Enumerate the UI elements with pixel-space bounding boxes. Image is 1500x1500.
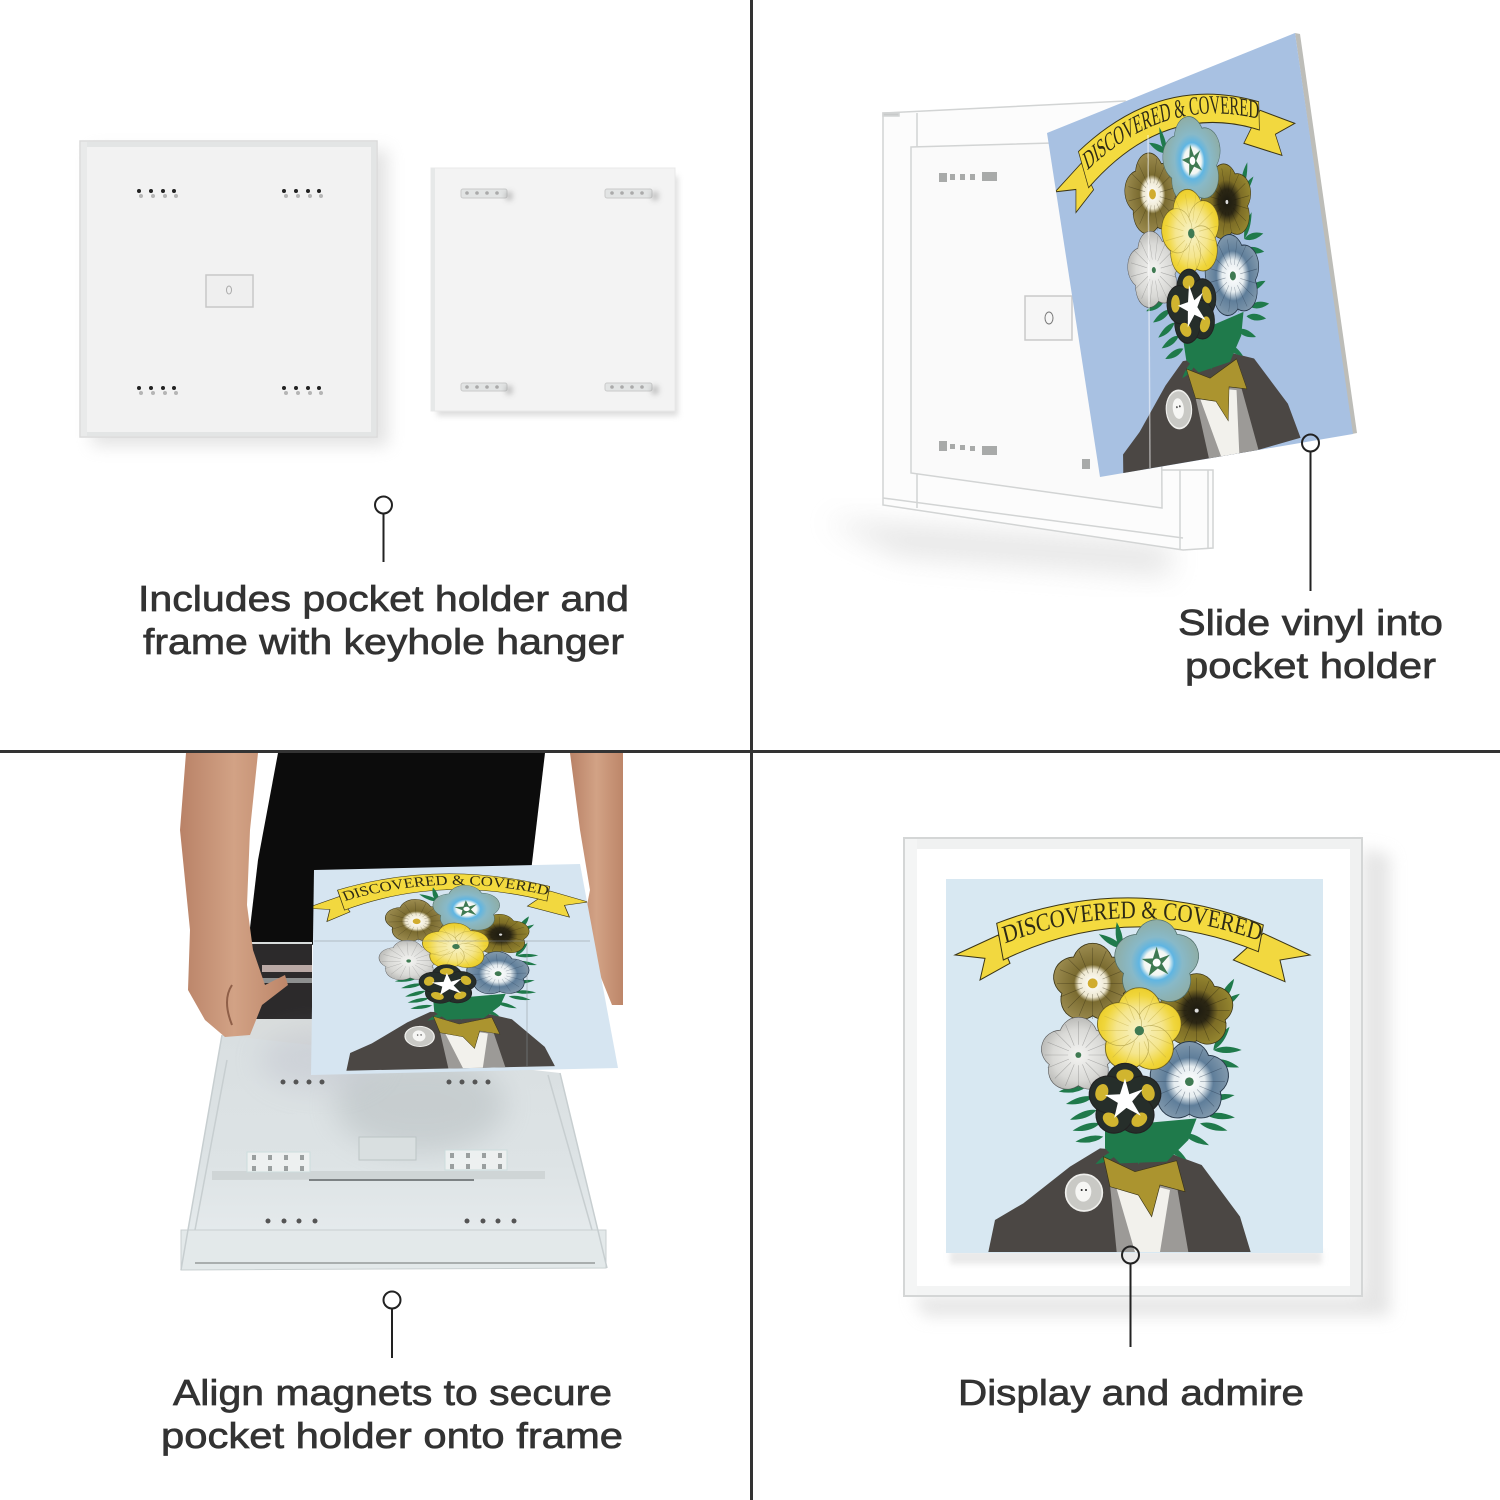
caption: includes: Includes pocket holder and — [138, 578, 629, 619]
person torso — [248, 753, 545, 945]
callout: display — [1122, 1246, 1139, 1347]
acrylic frame with keyhole hanger — [80, 141, 388, 446]
caption: align magnets: Align magnets to secure — [173, 1372, 612, 1413]
panel: slide vinyl into holder — [852, 33, 1357, 580]
logo badge — [1025, 296, 1072, 340]
album cover: DISCOVERED & COVERED — [1001, 902, 1262, 944]
album cover held: DISCOVERED & COVERED — [342, 876, 548, 901]
left arm and hand — [180, 753, 288, 1037]
acrylic frame — [904, 838, 1362, 1296]
caption: slide vinyl: pocket holder — [1185, 645, 1436, 686]
panel: parts included — [80, 141, 678, 446]
caption: slide vinyl: Slide vinyl into — [1178, 602, 1443, 643]
callout: align magnets — [384, 1292, 400, 1358]
floor shadow — [825, 520, 1170, 575]
caption: align magnets — [161, 1372, 623, 1456]
acrylic tray — [181, 942, 607, 1270]
caption: includes: frame with keyhole hanger — [143, 621, 624, 662]
frame shadow — [912, 848, 1390, 1316]
standing acrylic frame — [883, 101, 1213, 550]
callout: pocket holder and frame — [375, 496, 392, 562]
panel: display and admire — [903, 837, 1394, 1320]
caption: display: Display and admire — [958, 1372, 1304, 1413]
magnet clips — [939, 172, 1090, 469]
callout: slide vinyl — [1302, 434, 1319, 591]
pocket holder — [431, 168, 678, 416]
panel: align magnets — [180, 753, 623, 1270]
caption: slide vinyl — [1178, 602, 1443, 686]
caption: includes — [138, 578, 629, 662]
album cover tilted: DISCOVERED & COVERED — [1082, 96, 1258, 170]
cover shadow — [950, 1250, 1322, 1264]
album cover — [946, 879, 1323, 1253]
album cover held — [311, 864, 618, 1075]
right arm and hand — [570, 753, 623, 1005]
album cover tilted — [1047, 33, 1357, 477]
caption: align magnets: pocket holder onto frame — [161, 1415, 623, 1456]
